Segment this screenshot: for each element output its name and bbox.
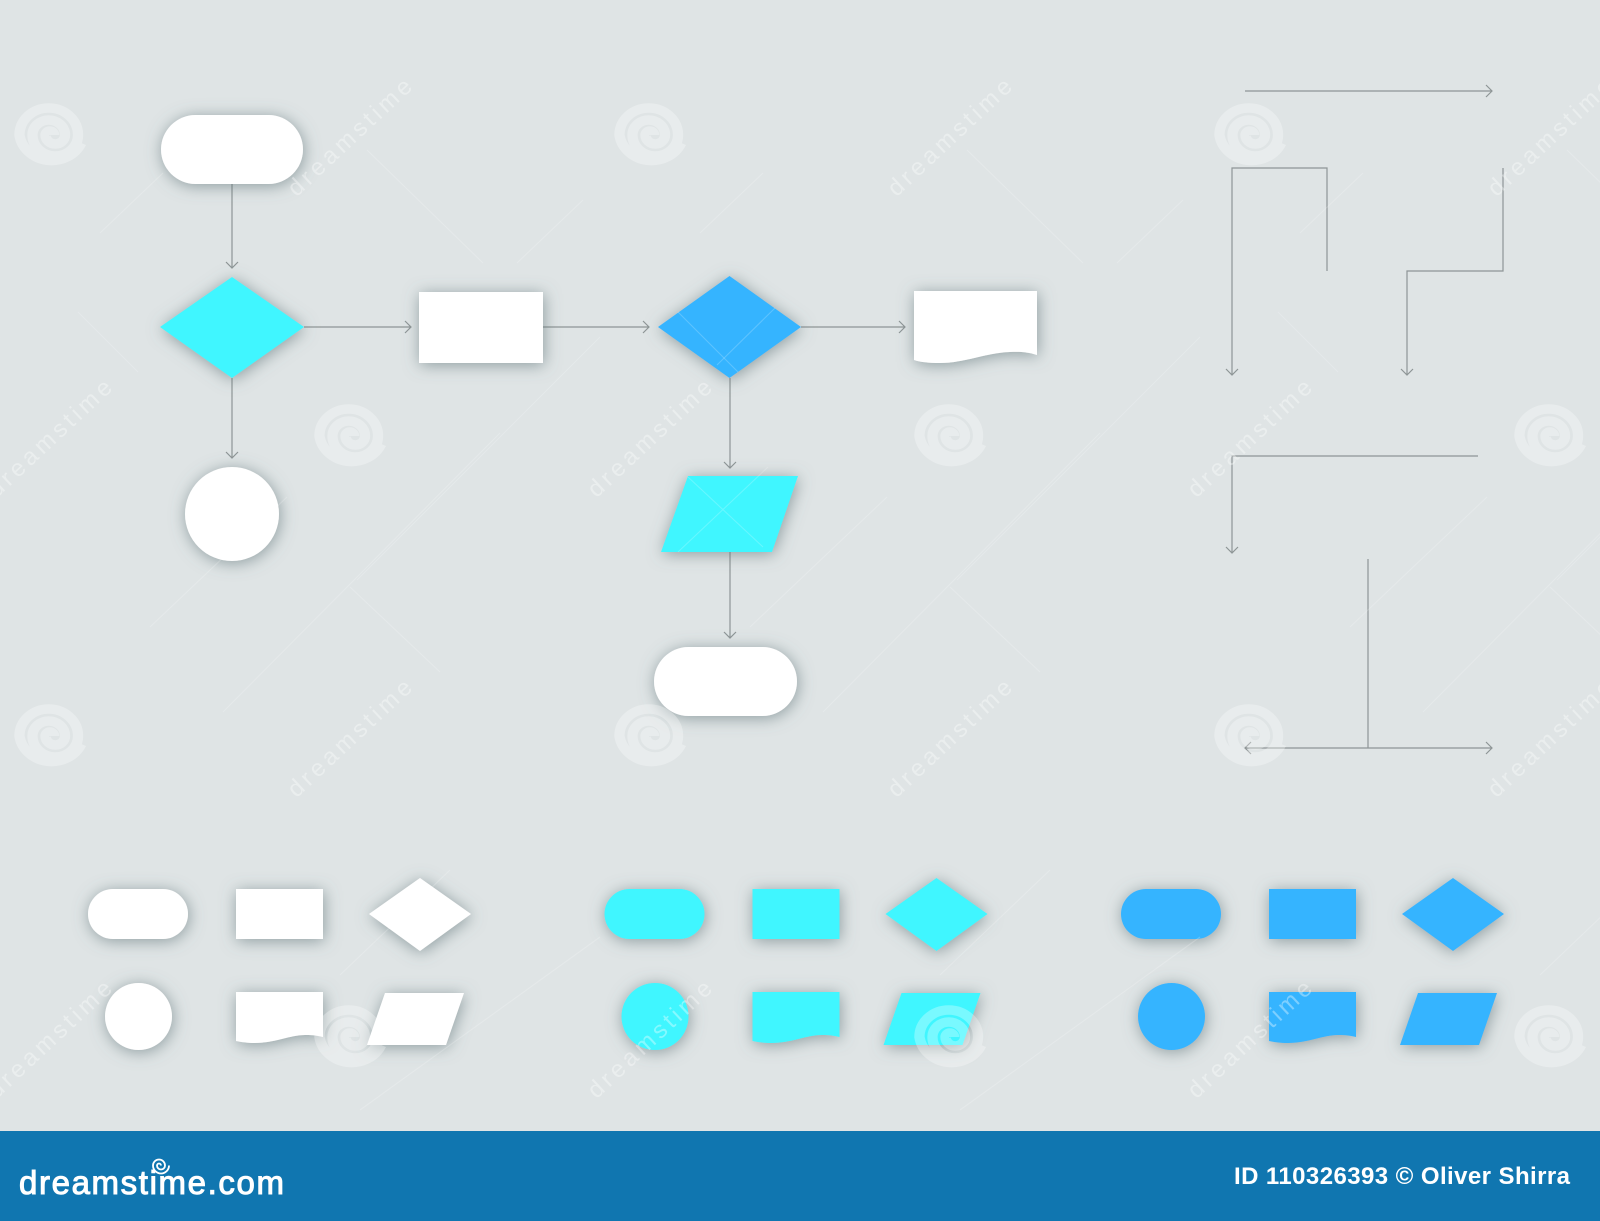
end pill [654,647,797,716]
rectangle [1269,889,1356,939]
T split arrow [1245,559,1492,754]
footer bar [0,1131,1600,1221]
watermark text: dreamstime [882,73,1018,202]
diamond [886,878,988,951]
document [752,992,840,1043]
parallelogram [367,993,464,1045]
footer logo spiral [153,1160,169,1174]
rectangle [236,889,323,939]
elbow arrow short [1226,456,1478,553]
watermark text: dreamstime [1182,374,1318,503]
watermark text: dreamstime [582,975,718,1104]
elbow arrow left [1226,168,1327,375]
document shape [914,291,1037,363]
process rectangle [419,292,543,363]
shape set: white [88,878,471,1050]
circle [1138,983,1205,1050]
pill [604,889,704,939]
start pill [161,115,303,184]
watermark spirals [19,108,1581,1063]
watermark text: dreamstime [282,73,418,202]
end circle [185,467,279,561]
shape set: cyan [604,878,988,1050]
straight arrow [1245,85,1492,97]
diamond [1402,878,1504,951]
decision diamond: blue [658,276,801,378]
main flowchart [160,115,1037,716]
decision diamond: cyan [160,277,304,378]
watermark text: dreamstime [582,374,718,503]
document [236,992,323,1043]
circle [622,983,688,1050]
watermark text: dreamstime [282,674,418,803]
input parallelogram: cyan [661,476,798,552]
circle [105,983,172,1050]
document [1269,992,1356,1043]
parallelogram [1400,993,1497,1045]
diamond [369,878,471,951]
connector samples [1226,85,1503,754]
connector arrows [226,184,905,638]
rectangle [752,889,840,939]
footer image credit: ID 110326393 © Oliver Shirra [1234,1163,1571,1190]
parallelogram [884,993,980,1045]
watermark text: dreamstime [882,674,1018,803]
footer logo text: dreamstime.com [19,1164,284,1201]
pill [88,889,188,939]
watermark lattice lines [0,150,1600,1110]
elbow arrow stepped [1401,168,1503,375]
shape set: blue [1121,878,1504,1050]
watermark text: dreamstime [1182,975,1318,1104]
pill [1121,889,1221,939]
